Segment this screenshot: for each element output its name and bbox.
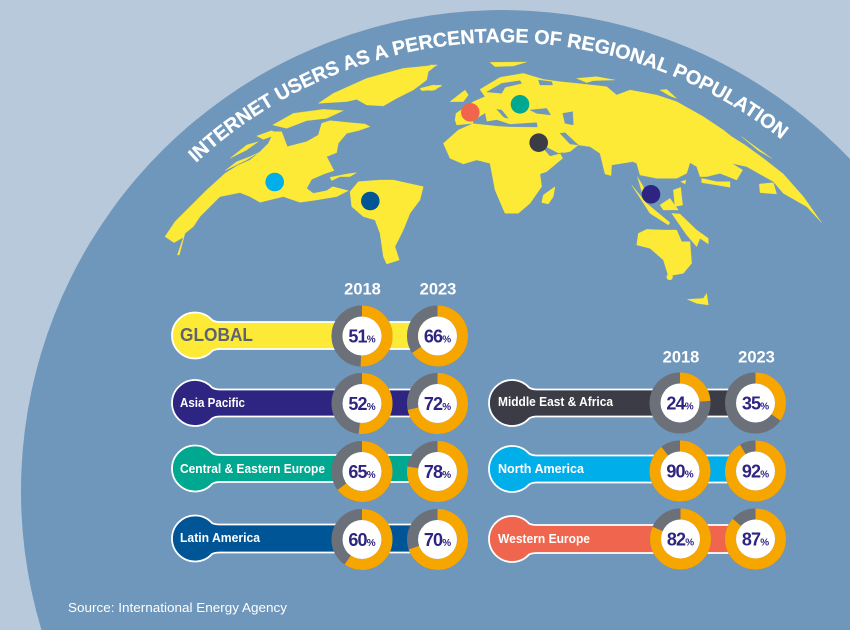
donut: Global 2018 [337, 311, 387, 361]
donut: Latin America 2018: 60% [348, 530, 376, 550]
pill: Central and Eastern Europe [172, 446, 435, 492]
Arctic islands [230, 142, 258, 158]
row: North America [489, 446, 780, 496]
year headers left [344, 280, 456, 298]
donut: Central and Eastern Europe 2018: 65% [348, 462, 376, 482]
row: Latin America [172, 514, 462, 564]
donut: Global 2023 [412, 311, 462, 361]
pill: North America: North America [498, 461, 585, 476]
donut: Global 2023: 66% [424, 326, 451, 346]
donut: Central and Eastern Europe 2023: 78% [424, 462, 451, 482]
donut: Middle East and Africa 2018: 24% [666, 394, 694, 414]
pill: Global [172, 312, 435, 358]
year headers left: 2018 [344, 280, 381, 298]
map marker: North America [265, 173, 284, 191]
pill: Middle East and Africa: Middle East & Africa [498, 394, 614, 409]
map marker: Asia Pacific [642, 185, 660, 204]
Afro-Eurasia and Oceania [430, 62, 822, 305]
year headers right: 2018 [663, 348, 699, 366]
map marker: Western Europe [461, 103, 480, 122]
pill: Latin America [172, 516, 435, 562]
pill: Western Europe [489, 516, 754, 562]
pill: Middle East and Africa [489, 380, 754, 426]
source: Source: International Energy Agency [68, 600, 288, 615]
donut: Latin America 2023 [412, 514, 462, 564]
pill: Asia Pacific [172, 380, 435, 426]
map marker: Middle East and Africa [529, 133, 548, 152]
donut: North America 2023: 92% [742, 462, 769, 482]
donut: Western Europe 2023 [730, 514, 780, 564]
row: Asia Pacific [172, 378, 462, 428]
donut: North America 2018: 90% [666, 462, 694, 482]
donut: Western Europe 2018 [656, 514, 706, 564]
year headers right: 2023 [738, 348, 775, 366]
donut: Central and Eastern Europe 2018 [337, 446, 387, 496]
row: Global [172, 311, 462, 361]
pill: Latin America: Latin America [180, 530, 261, 545]
pill: Central and Eastern Europe: Central & Eastern Europe [180, 461, 325, 476]
donut: Asia Pacific 2023: 72% [424, 394, 451, 414]
pill: Western Europe: Western Europe [498, 531, 590, 546]
donut: North America 2023 [730, 446, 780, 496]
donut: Asia Pacific 2018: 52% [348, 394, 376, 414]
row: Central and Eastern Europe [172, 446, 462, 496]
pill: Global: GLOBAL [180, 325, 253, 345]
pill: Asia Pacific: Asia Pacific [180, 395, 245, 410]
donut: Western Europe 2023: 87% [742, 530, 769, 550]
seas cut from the landmass [473, 80, 578, 156]
row: Middle East and Africa [489, 378, 780, 428]
year headers right [663, 348, 775, 366]
donut: Western Europe 2018: 82% [667, 530, 694, 550]
donut: Middle East and Africa 2023 [730, 378, 780, 428]
title: INTERNET USERS AS A PERCENTAGE OF REGIONAL POPULATION [188, 28, 789, 162]
donut: Asia Pacific 2018 [337, 378, 387, 428]
donut: Latin America 2023: 70% [424, 530, 451, 550]
americas and Greenland [165, 65, 442, 264]
world map [165, 62, 822, 305]
map marker: Central and Eastern Europe [511, 95, 529, 114]
donut: North America 2018 [655, 446, 705, 496]
donut: Asia Pacific 2023 [412, 378, 462, 428]
year headers left: 2023 [420, 280, 456, 298]
donut: Central and Eastern Europe 2023 [412, 446, 462, 496]
map marker: Latin America [361, 192, 380, 210]
donut: Middle East and Africa 2018 [655, 378, 705, 428]
donut: Latin America 2018 [337, 514, 387, 564]
donut: Global 2018: 51% [348, 326, 376, 346]
pill: North America [489, 446, 754, 492]
donut: Middle East and Africa 2023: 35% [742, 394, 769, 414]
row: Western Europe [489, 514, 780, 564]
